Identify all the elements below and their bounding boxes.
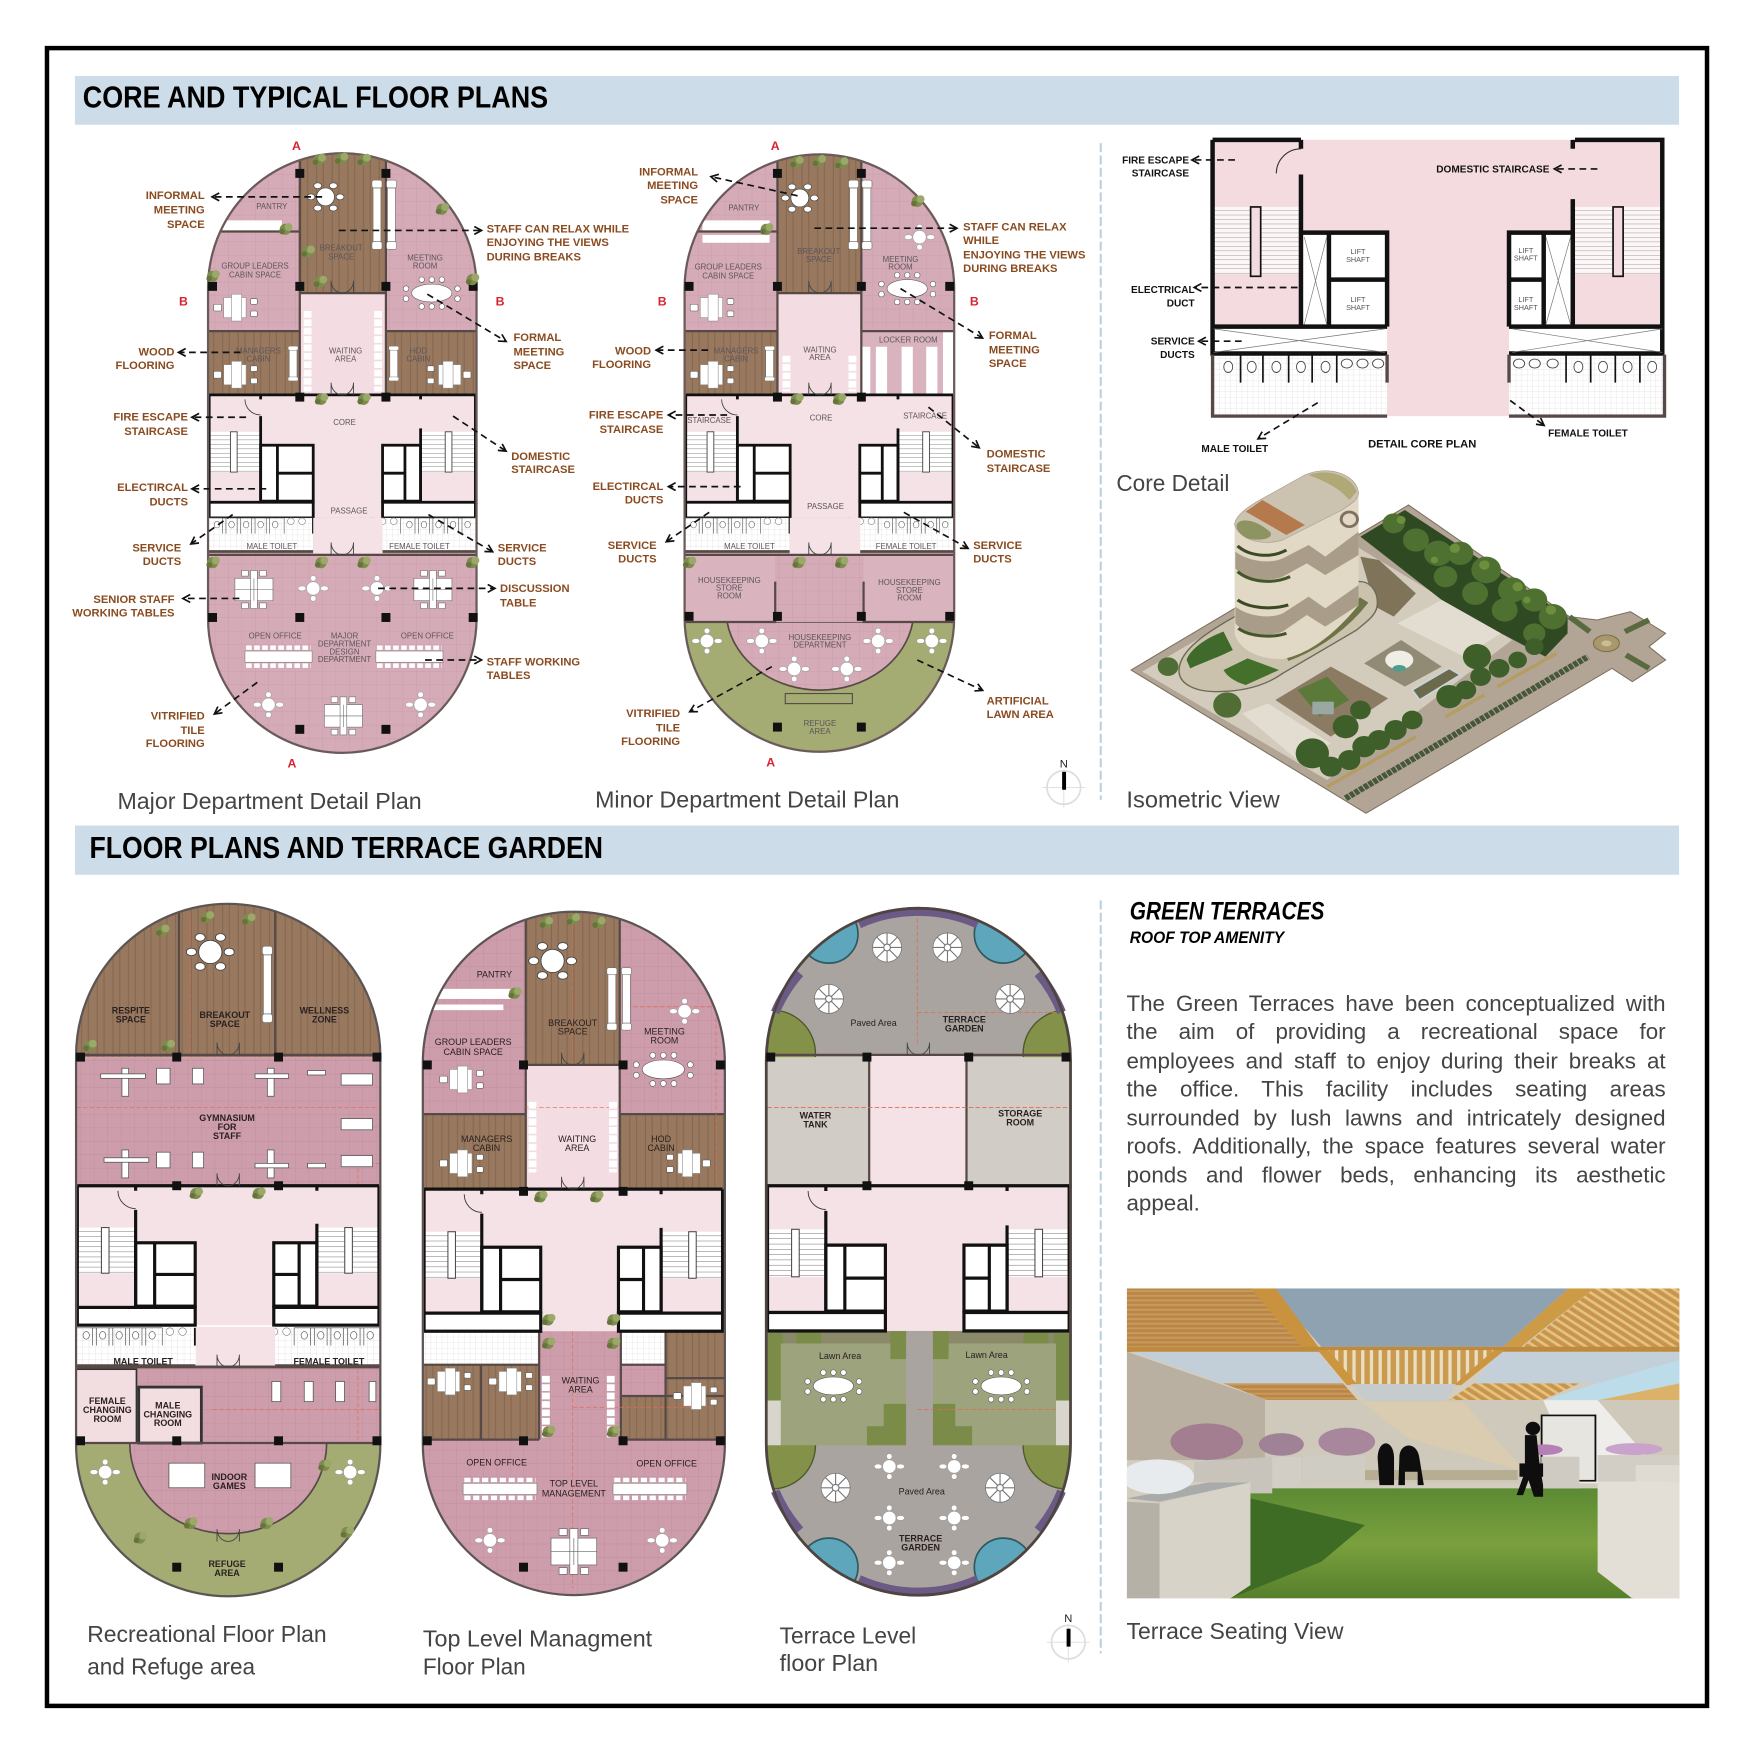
inner paving bbox=[1142, 547, 1512, 780]
planters bbox=[1194, 1455, 1679, 1493]
callouts: core detail: FEMALE TOILET bbox=[1548, 428, 1629, 439]
sky bbox=[1543, 1360, 1679, 1400]
plan: terrace level bbox=[764, 906, 1072, 1597]
callouts: major department: INFORMAL bbox=[146, 190, 205, 202]
callouts: minor department: WHILE bbox=[963, 235, 1000, 247]
core detail plan: SHAFT bbox=[1346, 255, 1370, 264]
plan: major department bbox=[72, 139, 630, 770]
section marks: B bbox=[970, 294, 979, 308]
glass roof bbox=[1270, 1288, 1569, 1347]
callouts: major department: WORKING TABLES bbox=[72, 607, 175, 619]
section header: floor plans and terrace garden bbox=[75, 826, 1679, 875]
room labels: major department: CORE bbox=[333, 418, 356, 427]
text block: description: ponds and flower beds, enhancing its aesthetic bbox=[1126, 1163, 1666, 1187]
room labels: top level: PANTRY bbox=[477, 970, 512, 980]
callouts: major department bbox=[72, 190, 630, 750]
room labels: recreational: MALE TOILET bbox=[113, 1357, 173, 1367]
room labels: recreational: STAFF bbox=[213, 1131, 242, 1141]
room labels: recreational: ROOM bbox=[93, 1414, 121, 1424]
room labels: major department: MAJOR bbox=[331, 632, 359, 641]
room labels: major department: CABIN bbox=[246, 354, 271, 363]
planter strips and road shrubs bbox=[1327, 653, 1588, 798]
callouts: minor department: MEETING bbox=[647, 180, 698, 192]
callouts: minor department: STAIRCASE bbox=[987, 463, 1051, 475]
callouts: minor department: WOOD bbox=[615, 346, 651, 358]
lower pergola bands bbox=[1223, 1383, 1579, 1400]
room labels: terrace bbox=[800, 1014, 1042, 1552]
room labels: top level: CABIN bbox=[473, 1143, 500, 1153]
text block: description: roofs. Additionally, the space features several water bbox=[1126, 1134, 1666, 1159]
callouts: minor department: STAIRCASE bbox=[600, 424, 664, 436]
room labels: minor department: CABIN bbox=[724, 354, 748, 363]
room labels: recreational: FEMALE bbox=[89, 1396, 126, 1406]
callouts: minor department: TILE bbox=[656, 723, 681, 735]
lower garden bbox=[1275, 667, 1388, 737]
corner planting bbox=[1158, 657, 1241, 718]
terrace seating render bbox=[1121, 1288, 1679, 1598]
room labels: top level: MEETING bbox=[644, 1027, 685, 1037]
room labels: terrace: Lawn Area bbox=[966, 1350, 1008, 1360]
heading: green terraces bbox=[1130, 899, 1325, 947]
room labels: recreational: GYMNASIUM bbox=[199, 1113, 255, 1123]
room labels: minor department: SPACE bbox=[806, 255, 832, 264]
room labels: minor department: ROOM bbox=[717, 591, 742, 600]
room labels: terrace: GARDEN bbox=[945, 1023, 984, 1033]
callouts: major department: DURING BREAKS bbox=[487, 252, 581, 264]
room labels: recreational: REFUGE bbox=[208, 1559, 246, 1569]
section marks: A bbox=[766, 755, 775, 769]
furniture: terrace bbox=[766, 933, 1071, 1576]
room labels: major department: SPACE bbox=[328, 253, 354, 262]
text block: description: surrounded by lush lawns and intricately designed bbox=[1126, 1106, 1666, 1130]
section header: core and typical floor plans: CORE AND TYPICAL FLOOR PLANS bbox=[83, 81, 548, 114]
plan: top level management bbox=[414, 906, 733, 1605]
callouts: minor department: ARTIFICIAL bbox=[987, 696, 1049, 708]
callouts: minor department: DUCTS bbox=[973, 554, 1012, 566]
door bbox=[1542, 1415, 1595, 1481]
section marks bbox=[658, 139, 979, 769]
callouts: major department: TABLES bbox=[487, 670, 531, 682]
purple flower bed bands bbox=[775, 911, 1062, 1592]
room labels: minor department: LOCKER ROOM bbox=[879, 335, 938, 344]
section marks: A bbox=[288, 756, 297, 770]
callouts: minor department: DOMESTIC bbox=[987, 449, 1046, 461]
room labels: top level: WAITING bbox=[558, 1134, 596, 1144]
text block: description: The Green Terraces have been conceptualized with bbox=[1126, 992, 1666, 1016]
room labels: minor department: ROOM bbox=[897, 594, 922, 603]
caption: terrace level: Terrace Level bbox=[780, 1622, 916, 1648]
room labels: major department: CABIN SPACE bbox=[229, 270, 281, 279]
furniture: minor department bbox=[683, 155, 954, 732]
callouts: minor department: VITRIFIED bbox=[626, 708, 680, 720]
room labels: major department: CABIN bbox=[406, 354, 431, 363]
room labels: major department: BREAKOUT bbox=[320, 244, 363, 253]
tower bbox=[1235, 471, 1359, 659]
furniture: major department bbox=[206, 153, 479, 735]
room labels: minor department: GROUP LEADERS bbox=[695, 263, 762, 272]
tree belt bbox=[1360, 510, 1568, 657]
caption: recreational: and Refuge area bbox=[87, 1654, 256, 1680]
divider upper bbox=[1100, 143, 1102, 800]
callouts: core detail: MALE TOILET bbox=[1201, 444, 1269, 455]
divider lower bbox=[1100, 900, 1102, 1653]
caption: isometric: Isometric View bbox=[1126, 787, 1281, 813]
room labels: top level: CABIN bbox=[647, 1143, 675, 1153]
caption: core detail: Core Detail bbox=[1116, 470, 1229, 496]
plan: minor department bbox=[589, 139, 1086, 769]
room labels: top level: BREAKOUT bbox=[548, 1018, 598, 1028]
callouts: minor department: SPACE bbox=[660, 195, 699, 207]
room labels: major department: DEPARTMENT bbox=[318, 655, 371, 664]
room labels: top level: GROUP LEADERS bbox=[435, 1037, 512, 1047]
callouts: core detail: FIRE ESCAPE bbox=[1122, 155, 1189, 166]
room labels: minor department: ROOM bbox=[888, 263, 913, 272]
room labels: major department bbox=[221, 202, 454, 664]
room labels: top level: AREA bbox=[568, 1385, 593, 1395]
room labels: recreational: BREAKOUT bbox=[200, 1010, 251, 1020]
text block: description: appeal. bbox=[1126, 1191, 1200, 1216]
callouts: major department: MEETING bbox=[154, 205, 205, 217]
room labels: terrace: ROOM bbox=[1006, 1117, 1034, 1127]
section marks: B bbox=[496, 294, 505, 308]
room labels: major department: AREA bbox=[335, 354, 357, 363]
room labels: minor department: CABIN SPACE bbox=[702, 272, 754, 281]
callouts: major department: FIRE ESCAPE bbox=[113, 412, 188, 424]
callouts: core detail: DOMESTIC STAIRCASE bbox=[1436, 164, 1550, 175]
callouts: minor department: SPACE bbox=[989, 358, 1027, 370]
room labels: minor department: AREA bbox=[809, 727, 831, 736]
room labels: minor department: STORE bbox=[716, 584, 743, 593]
room labels: recreational bbox=[83, 1005, 365, 1578]
room labels: minor department: MANAGERS bbox=[714, 346, 758, 355]
room labels: major department: PANTRY bbox=[256, 202, 288, 211]
callouts: minor department: DUCTS bbox=[618, 554, 657, 566]
section marks: A bbox=[292, 139, 301, 153]
caption: terrace seating: Terrace Seating View bbox=[1126, 1618, 1344, 1644]
front trees bbox=[1296, 638, 1544, 777]
room labels: recreational: CHANGING bbox=[143, 1409, 192, 1419]
caption: terrace level: floor Plan bbox=[780, 1650, 878, 1676]
callouts: minor department: ENJOYING THE VIEWS bbox=[963, 249, 1086, 261]
callouts: minor department: DUCTS bbox=[625, 494, 664, 506]
silhouettes bbox=[1378, 1422, 1543, 1497]
callouts: major department: STAFF CAN RELAX WHILE bbox=[487, 224, 630, 236]
room labels: major department: MEETING bbox=[407, 254, 443, 263]
room labels: minor department: MEETING bbox=[883, 255, 918, 264]
callouts: major department: DISCUSSION bbox=[500, 583, 570, 595]
icon: north compass lower bbox=[1047, 1613, 1090, 1662]
caption: top level: Floor Plan bbox=[423, 1654, 526, 1680]
tower logo bbox=[1341, 512, 1357, 527]
core detail plan: SHAFT bbox=[1514, 254, 1538, 263]
site ground bbox=[1131, 505, 1666, 813]
room labels: minor department: PASSAGE bbox=[807, 502, 844, 511]
front planters bbox=[1121, 1459, 1679, 1598]
room labels: top level: CABIN SPACE bbox=[443, 1047, 503, 1057]
caption: major department: Major Department Detail Plan bbox=[117, 788, 422, 814]
callouts: core detail: DUCT bbox=[1167, 299, 1196, 310]
callouts: major department: WOOD bbox=[139, 347, 175, 359]
room labels: terrace: STORAGE bbox=[998, 1108, 1042, 1118]
left wall bbox=[1127, 1352, 1267, 1460]
section header: core and typical floor plans bbox=[75, 76, 1679, 125]
room labels: minor department: MALE TOILET bbox=[724, 542, 775, 551]
room labels: major department: OPEN OFFICE bbox=[249, 632, 302, 641]
callouts: minor department: SERVICE bbox=[608, 540, 657, 552]
flowers bbox=[1170, 1423, 1662, 1460]
callouts: core detail: DETAIL CORE PLAN bbox=[1368, 438, 1476, 450]
room labels: recreational: FEMALE TOILET bbox=[293, 1357, 365, 1367]
callouts: major department: DUCTS bbox=[498, 556, 537, 568]
room labels: minor department: HOUSEKEEPING bbox=[698, 576, 761, 585]
room labels: minor department: FEMALE TOILET bbox=[876, 542, 937, 551]
callouts: major department: DOMESTIC bbox=[511, 451, 570, 463]
callouts: core detail: STAIRCASE bbox=[1132, 169, 1189, 180]
icon: north compass upper bbox=[1043, 758, 1085, 808]
icon: north compass upper: N bbox=[1060, 758, 1068, 770]
caption: minor department: Minor Department Detail Plan bbox=[595, 787, 899, 813]
callouts: minor department: FLOORING bbox=[621, 736, 680, 748]
text block: description bbox=[1126, 991, 1668, 1221]
room labels: minor department: DEPARTMENT bbox=[793, 641, 847, 650]
room labels: recreational: WELLNESS bbox=[300, 1005, 349, 1015]
callouts: major department: STAIRCASE bbox=[124, 426, 188, 438]
caption: top level bbox=[423, 1626, 653, 1680]
core detail plan: LIFT bbox=[1518, 295, 1534, 304]
core detail plan: LIFT bbox=[1351, 247, 1366, 256]
caption: top level: Top Level Managment bbox=[423, 1626, 653, 1652]
podium terrace bbox=[1179, 582, 1377, 692]
room labels: top level: TOP LEVEL bbox=[550, 1479, 598, 1489]
callouts: major department: DUCTS bbox=[143, 556, 182, 568]
callouts: minor department: LAWN AREA bbox=[987, 709, 1054, 721]
callouts: major department: ENJOYING THE VIEWS bbox=[487, 237, 609, 249]
room labels: major department: WAITING bbox=[329, 346, 362, 355]
callouts: core detail: DUCTS bbox=[1160, 350, 1195, 361]
tower roof bbox=[1235, 471, 1359, 542]
entrance block bbox=[1412, 668, 1460, 700]
core detail plan: LIFT bbox=[1351, 295, 1366, 304]
caption: terrace level bbox=[780, 1622, 916, 1676]
room labels: minor department: REFUGE bbox=[804, 719, 836, 728]
caption: recreational: Recreational Floor Plan bbox=[87, 1621, 327, 1647]
callouts: major department: MEETING bbox=[513, 347, 564, 359]
core detail plan: SHAFT bbox=[1346, 303, 1370, 312]
room labels: top level: AREA bbox=[565, 1143, 589, 1153]
callouts: major department: SPACE bbox=[167, 219, 205, 231]
room labels: major department: FEMALE TOILET bbox=[389, 542, 450, 551]
room labels: recreational: SPACE bbox=[116, 1014, 146, 1024]
section marks: B bbox=[658, 294, 667, 308]
callouts: minor department: ELECTIRCAL bbox=[593, 481, 664, 493]
room labels: recreational: MALE bbox=[155, 1400, 180, 1410]
roundabout and junction planting bbox=[1569, 617, 1649, 668]
core detail plan: LIFT bbox=[1518, 246, 1534, 255]
furniture: recreational bbox=[76, 911, 381, 1572]
room labels: terrace: TANK bbox=[803, 1120, 828, 1130]
furniture: top level bbox=[423, 913, 725, 1574]
room labels: major department: PASSAGE bbox=[331, 506, 367, 515]
callouts: major department: TILE bbox=[180, 725, 205, 737]
callouts: minor department: FORMAL bbox=[989, 330, 1037, 342]
callouts: major department: DUCTS bbox=[149, 497, 188, 509]
callouts: minor department bbox=[589, 167, 1086, 748]
room labels: recreational: AREA bbox=[214, 1568, 240, 1578]
callouts: minor department: SERVICE bbox=[973, 540, 1023, 552]
pergola bbox=[1127, 1288, 1679, 1352]
isometric view bbox=[1131, 471, 1666, 813]
room labels: terrace: Paved Area bbox=[899, 1486, 945, 1496]
lower ceiling glass bbox=[1132, 1352, 1343, 1383]
plan: recreational floor and refuge bbox=[67, 895, 392, 1605]
room labels: recreational: ZONE bbox=[312, 1014, 337, 1024]
callouts: minor department: MEETING bbox=[989, 344, 1040, 356]
core detail plan bbox=[1122, 140, 1665, 455]
parking sheds bbox=[1242, 600, 1501, 760]
central fountain court bbox=[1364, 640, 1442, 687]
room labels: minor department: HOUSEKEEPING bbox=[878, 578, 941, 587]
callouts: core detail: SERVICE bbox=[1151, 337, 1195, 348]
icon: north compass lower: N bbox=[1064, 1613, 1072, 1625]
section marks: B bbox=[179, 294, 188, 308]
room labels: minor department: WAITING bbox=[803, 345, 837, 354]
room labels: recreational: GAMES bbox=[213, 1481, 246, 1491]
room labels: major department: ROOM bbox=[413, 261, 437, 270]
room labels: major department: MALE TOILET bbox=[247, 542, 297, 551]
room labels: minor department: STORE bbox=[896, 586, 923, 595]
room labels: terrace: GARDEN bbox=[901, 1542, 940, 1552]
section header: floor plans and terrace garden: FLOOR PLANS AND TERRACE GARDEN bbox=[89, 832, 603, 865]
lawn bbox=[1230, 1488, 1634, 1598]
callouts: major department: FORMAL bbox=[513, 332, 561, 344]
room labels: top level: OPEN OFFICE bbox=[636, 1459, 697, 1469]
callouts: minor department: FLOORING bbox=[592, 359, 651, 371]
room labels: minor department: CORE bbox=[810, 414, 832, 423]
callouts: minor department: DURING BREAKS bbox=[963, 263, 1058, 275]
room labels: major department: DESIGN bbox=[330, 647, 360, 656]
callouts: major department: STAFF WORKING bbox=[487, 657, 580, 669]
callouts: major department: ELECTIRCAL bbox=[117, 482, 188, 494]
room labels: terrace: Lawn Area bbox=[819, 1351, 861, 1361]
callouts: major department: VITRIFIED bbox=[151, 710, 205, 722]
room labels: terrace: WATER bbox=[800, 1111, 832, 1121]
room labels: minor department: STAIRCASE bbox=[903, 411, 947, 420]
callouts: major department: SERVICE bbox=[132, 542, 182, 554]
center slats bbox=[1327, 1350, 1494, 1384]
room labels: major department: DEPARTMENT bbox=[318, 640, 371, 649]
callouts: minor department: INFORMAL bbox=[639, 167, 698, 179]
room labels: major department: OPEN OFFICE bbox=[401, 632, 454, 641]
callouts: minor department: FIRE ESCAPE bbox=[589, 409, 664, 421]
callouts: major department: SENIOR STAFF bbox=[93, 594, 175, 606]
callouts: core detail bbox=[1122, 155, 1629, 455]
side garden bbox=[1360, 557, 1416, 617]
room labels: terrace: Paved Area bbox=[851, 1018, 897, 1028]
room labels: minor department: HOUSEKEEPING bbox=[789, 633, 851, 642]
room labels: minor department: BREAKOUT bbox=[797, 247, 841, 256]
room labels: major department: GROUP LEADERS bbox=[221, 261, 289, 270]
room labels: recreational: CHANGING bbox=[83, 1405, 132, 1415]
room labels: minor department: AREA bbox=[809, 353, 831, 362]
back wall and light bbox=[1265, 1400, 1679, 1483]
text block: description: the office. This facility includes seating areas bbox=[1126, 1077, 1666, 1102]
heading: green terraces: GREEN TERRACES bbox=[1130, 899, 1325, 926]
callouts: major department: SERVICE bbox=[498, 542, 547, 554]
room labels: minor department: STAIRCASE bbox=[687, 416, 731, 425]
room labels: recreational: ROOM bbox=[154, 1418, 182, 1428]
callouts: major department: FLOORING bbox=[146, 738, 205, 750]
core detail plan: SHAFT bbox=[1514, 303, 1538, 312]
section marks: A bbox=[771, 139, 780, 153]
callouts: minor department: STAFF CAN RELAX bbox=[963, 221, 1067, 233]
room labels: top level: OPEN OFFICE bbox=[466, 1457, 527, 1467]
room labels: recreational: SPACE bbox=[210, 1019, 240, 1029]
room labels: terrace: TERRACE bbox=[899, 1533, 942, 1543]
room labels: top level: ROOM bbox=[651, 1036, 678, 1046]
room labels: top level: MANAGEMENT bbox=[542, 1489, 606, 1499]
text block: description: employees and staff to enjoy during their breaks at bbox=[1126, 1049, 1666, 1073]
room labels: recreational: RESPITE bbox=[112, 1005, 150, 1015]
room labels: minor department bbox=[687, 203, 947, 736]
room labels: top level: WAITING bbox=[562, 1376, 600, 1386]
room labels: top level bbox=[435, 970, 697, 1499]
room labels: recreational: FOR bbox=[218, 1122, 237, 1132]
room labels: major department: MANAGERS bbox=[236, 346, 281, 355]
callouts: major department: FLOORING bbox=[116, 360, 175, 372]
callouts: major department: TABLE bbox=[500, 597, 537, 609]
callouts: major department: SPACE bbox=[513, 360, 552, 372]
caption: recreational bbox=[87, 1621, 327, 1680]
section marks bbox=[179, 139, 505, 770]
text block: description: the aim of providing a recreational space for bbox=[1126, 1020, 1666, 1045]
room labels: top level: MANAGERS bbox=[461, 1134, 512, 1144]
room labels: top level: SPACE bbox=[558, 1027, 588, 1037]
room labels: recreational: INDOOR bbox=[211, 1472, 248, 1482]
room labels: major department: HOD bbox=[410, 346, 427, 355]
callouts: major department: STAIRCASE bbox=[511, 464, 575, 476]
room labels: minor department: PANTRY bbox=[728, 203, 760, 212]
heading: green terraces: ROOF TOP AMENITY bbox=[1130, 929, 1286, 947]
room labels: top level: HOD bbox=[651, 1134, 672, 1144]
room labels: terrace: TERRACE bbox=[943, 1014, 986, 1024]
callouts: core detail: ELECTRICAL bbox=[1131, 285, 1195, 296]
